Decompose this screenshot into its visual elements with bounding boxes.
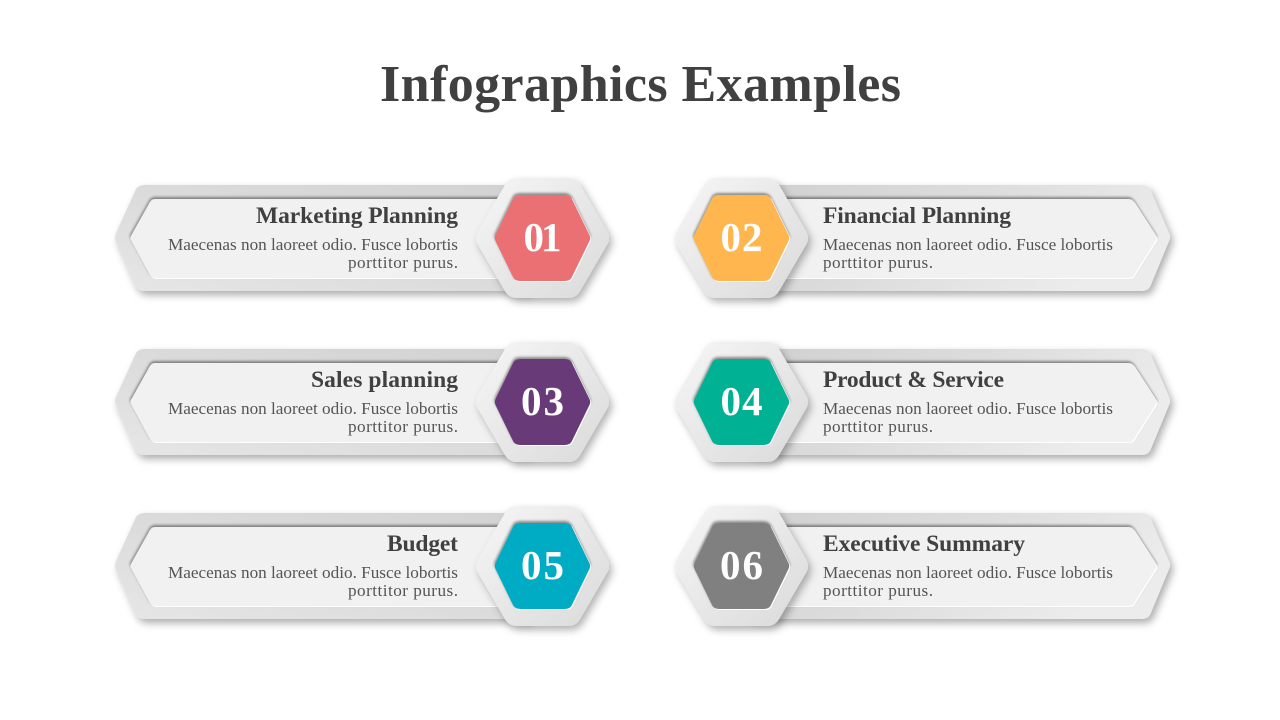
heading 06: Executive Summary bbox=[823, 531, 1025, 557]
body text 05: porttitor purus. bbox=[348, 581, 458, 600]
heading 04: Product & Service bbox=[823, 367, 1004, 393]
body text 05 bbox=[168, 563, 458, 600]
panel: item 02 Financial Planning bbox=[675, 178, 1170, 298]
body text 01 bbox=[168, 235, 458, 272]
hexagon badge 03 bbox=[476, 342, 609, 462]
body text 04: Maecenas non laoreet odio. Fusce lobortis bbox=[823, 399, 1113, 418]
hexagon badge 02: 02 bbox=[720, 214, 762, 260]
hexagon badge 01 bbox=[476, 178, 609, 298]
hexagon badge 04: 04 bbox=[720, 378, 762, 424]
body text 02 bbox=[823, 235, 1113, 272]
hexagon badge 02 bbox=[675, 178, 808, 298]
hexagon badge 01: 01 bbox=[524, 214, 562, 260]
bar frame 05 bbox=[115, 513, 530, 619]
body text 02: Maecenas non laoreet odio. Fusce lobortis bbox=[823, 235, 1113, 254]
panel: item 04 Product & Service bbox=[675, 342, 1170, 462]
heading 03: Sales planning bbox=[311, 367, 458, 393]
body text 04 bbox=[823, 399, 1113, 436]
bar frame 04 bbox=[750, 349, 1170, 455]
body text 01: Maecenas non laoreet odio. Fusce lobortis bbox=[168, 235, 458, 254]
panel: item 03 Sales planning bbox=[115, 342, 609, 462]
hexagon badge 06: 06 bbox=[720, 542, 763, 588]
body text 06 bbox=[823, 563, 1113, 600]
panel: item 01 Marketing Planning bbox=[115, 178, 609, 298]
hexagon badge 04 bbox=[675, 342, 808, 462]
bar frame 02 bbox=[750, 185, 1170, 291]
heading 02: Financial Planning bbox=[823, 203, 1011, 229]
body text 06: porttitor purus. bbox=[823, 581, 933, 600]
body text 03 bbox=[168, 399, 458, 436]
bar frame 03 bbox=[115, 349, 530, 455]
heading 01: Marketing Planning bbox=[256, 203, 458, 229]
hexagon badge 06 bbox=[675, 506, 808, 626]
hexagon badge 05 bbox=[476, 506, 609, 626]
panel: item 06 Executive Summary bbox=[675, 506, 1170, 626]
panel: item 05 Budget bbox=[115, 506, 609, 626]
body text 03: porttitor purus. bbox=[348, 417, 458, 436]
body text 04: porttitor purus. bbox=[823, 417, 933, 436]
body text 05: Maecenas non laoreet odio. Fusce lobortis bbox=[168, 563, 458, 582]
heading 05: Budget bbox=[387, 531, 458, 557]
bar frame 01 bbox=[115, 185, 530, 291]
body text 06: Maecenas non laoreet odio. Fusce lobortis bbox=[823, 563, 1113, 582]
body text 01: porttitor purus. bbox=[348, 253, 458, 272]
body text 02: porttitor purus. bbox=[823, 253, 933, 272]
bar frame 06 bbox=[750, 513, 1170, 619]
hexagon badge 05: 05 bbox=[521, 542, 564, 588]
hexagon badge 03: 03 bbox=[521, 378, 564, 424]
title: Infographics Examples bbox=[380, 56, 901, 113]
body text 03: Maecenas non laoreet odio. Fusce lobortis bbox=[168, 399, 458, 418]
